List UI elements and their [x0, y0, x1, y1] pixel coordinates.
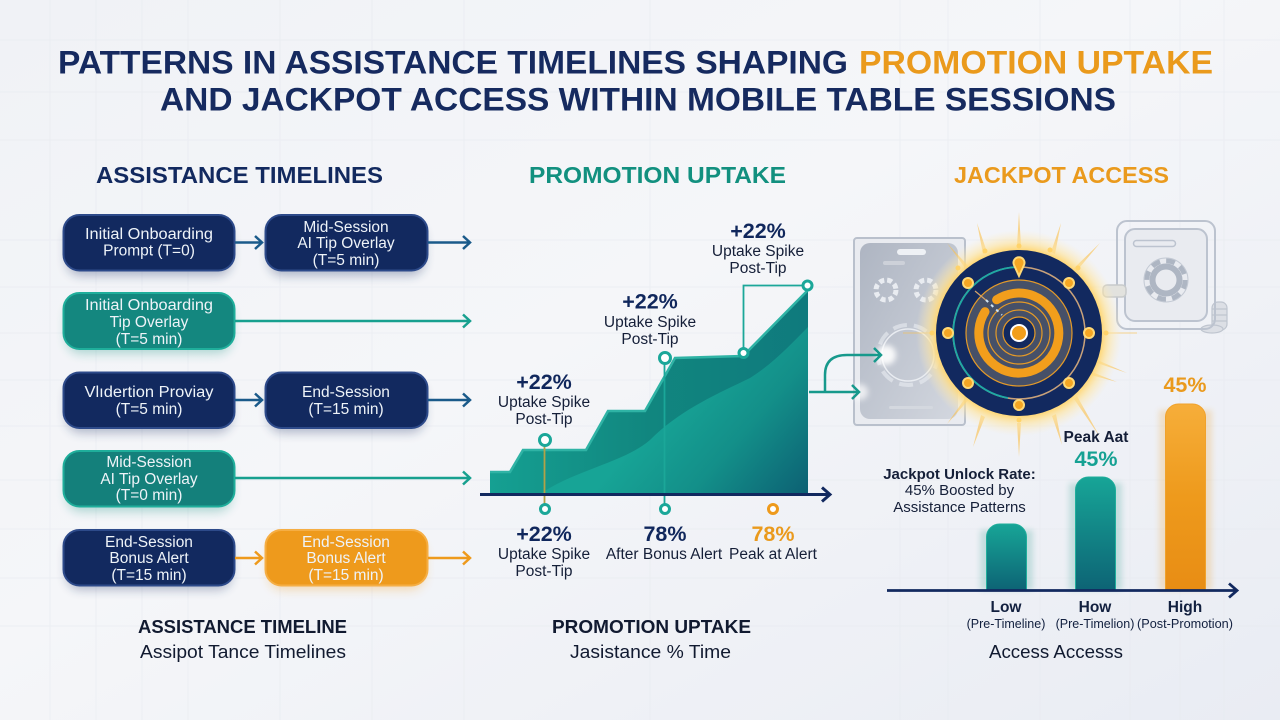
bar labels: Low [990, 599, 1022, 616]
stat: uptake spike: +22% [516, 522, 572, 546]
row 3 timeline: End-Session [302, 384, 390, 401]
chart axis [480, 488, 830, 502]
annotation: third spike: Post-Tip [729, 260, 787, 277]
annotation: second spike: +22% [622, 290, 678, 314]
callout: jackpot unlock rate [883, 466, 1036, 516]
icon: safe [1103, 221, 1227, 333]
annotation: first spike: +22% [516, 370, 572, 394]
icon: phone [854, 238, 965, 425]
footer: promotion uptake: PROMOTION UPTAKE [552, 617, 751, 637]
row 5 timeline: Bonus Alert [109, 550, 189, 567]
row 5 timeline: (T=15 min) [111, 567, 187, 584]
bar: how [1076, 477, 1116, 590]
annotation: third spike: +22% [730, 219, 786, 243]
bar labels: High [1168, 599, 1202, 616]
stat: uptake spike: Uptake Spike [498, 546, 590, 563]
value: peak [1064, 429, 1128, 471]
area chart: promotion uptake [480, 219, 830, 580]
row 5 timeline: (T=15 min) [308, 567, 384, 584]
row 1 timeline [64, 215, 470, 276]
panel: assistance timelines [64, 215, 470, 590]
callout: jackpot unlock rate: Assistance Patterns [893, 499, 1026, 516]
footer: promotion uptake [552, 617, 751, 662]
row 1 timeline: (T=5 min) [313, 252, 379, 269]
callout: jackpot unlock rate: 45% Boosted by [905, 482, 1015, 499]
bar: low [986, 524, 1026, 590]
annotation: first spike: Uptake Spike [498, 394, 590, 411]
bar labels: (Pre-Timeline) [967, 617, 1045, 631]
bar: high [1166, 404, 1206, 590]
row 3 timeline [64, 372, 470, 433]
row 1 timeline: Initial Onboarding [85, 226, 213, 243]
stat: peak at alert: Peak at Alert [729, 546, 818, 563]
footer: assistance timeline: Assipot Tance Timelines [140, 642, 346, 662]
annotation: third spike: Uptake Spike [712, 243, 804, 260]
connector arrows into phone [809, 345, 896, 400]
bar labels: How [1079, 599, 1112, 616]
row 2 timeline: (T=5 min) [116, 331, 182, 348]
row 4 timeline [64, 451, 470, 512]
row 3 timeline: Vlıdertion Proviay [84, 384, 214, 401]
annotation: third spike [712, 219, 804, 277]
annotation: first spike [498, 370, 590, 428]
bar labels: (Post-Promotion) [1137, 617, 1233, 631]
footer: assistance timeline: ASSISTANCE TIMELINE [138, 617, 347, 637]
row 5 timeline: End-Session [302, 534, 390, 551]
footer: access: Access Accesss [989, 642, 1123, 662]
row 2 timeline: Initial Onboarding [85, 297, 213, 314]
row 3 timeline: (T=15 min) [308, 401, 384, 418]
row 5 timeline: Bonus Alert [306, 550, 386, 567]
stat: peak at alert: 78% [751, 522, 795, 546]
row 4 timeline: Mid-Session [106, 454, 192, 471]
stat: peak at alert [729, 522, 818, 563]
icon: jackpot wheel [903, 212, 1137, 457]
row 4 timeline: (T=0 min) [116, 487, 182, 504]
bar labels: (Pre-Timelion) [1056, 617, 1134, 631]
stat: after bonus alert: After Bonus Alert [606, 546, 723, 563]
value: peak: 45% [1074, 447, 1118, 471]
title [58, 44, 1213, 118]
footer: assistance timeline [138, 617, 347, 662]
row 1 timeline: AI Tip Overlay [297, 235, 395, 252]
row 2 timeline [64, 293, 470, 354]
title: PROMOTION UPTAKE [859, 44, 1213, 80]
stat: uptake spike: Post-Tip [515, 563, 573, 580]
stat: after bonus alert: 78% [643, 522, 687, 546]
wheel rays [903, 212, 1137, 457]
row 3 timeline: (T=5 min) [116, 401, 182, 418]
heading: jackpot access: JACKPOT ACCESS [954, 162, 1169, 188]
bar chart: jackpot access [883, 373, 1237, 631]
annotation: second spike: Post-Tip [621, 331, 679, 348]
row 2 timeline: Tip Overlay [110, 314, 189, 331]
title: PATTERNS IN ASSISTANCE TIMELINES SHAPING [58, 44, 848, 80]
footer: promotion uptake: Jasistance % Time [570, 642, 731, 662]
row 1 timeline: Prompt (T=0) [103, 242, 195, 260]
coin stack [1201, 302, 1227, 333]
bar labels [967, 599, 1233, 631]
heading: promotion uptake: PROMOTION UPTAKE [529, 162, 786, 188]
value: high: 45% [1163, 373, 1207, 397]
heading: assistance timelines: ASSISTANCE TIMELINES [96, 162, 383, 188]
annotation: second spike [604, 290, 696, 348]
row 5 timeline: End-Session [105, 534, 193, 551]
title: AND JACKPOT ACCESS WITHIN MOBILE TABLE SESSIONS [160, 82, 1116, 118]
annotation: first spike: Post-Tip [515, 411, 573, 428]
row 5 timeline [64, 530, 470, 590]
value: peak: Peak Aat [1064, 429, 1128, 446]
stat: uptake spike [498, 522, 590, 580]
annotation: second spike: Uptake Spike [604, 314, 696, 331]
small coin [1103, 285, 1126, 297]
row 1 timeline: Mid-Session [303, 219, 389, 236]
row 4 timeline: AI Tip Overlay [100, 471, 198, 488]
bar axis [887, 584, 1237, 598]
stat: after bonus alert [606, 522, 723, 563]
callout: jackpot unlock rate: Jackpot Unlock Rate: [883, 466, 1036, 483]
